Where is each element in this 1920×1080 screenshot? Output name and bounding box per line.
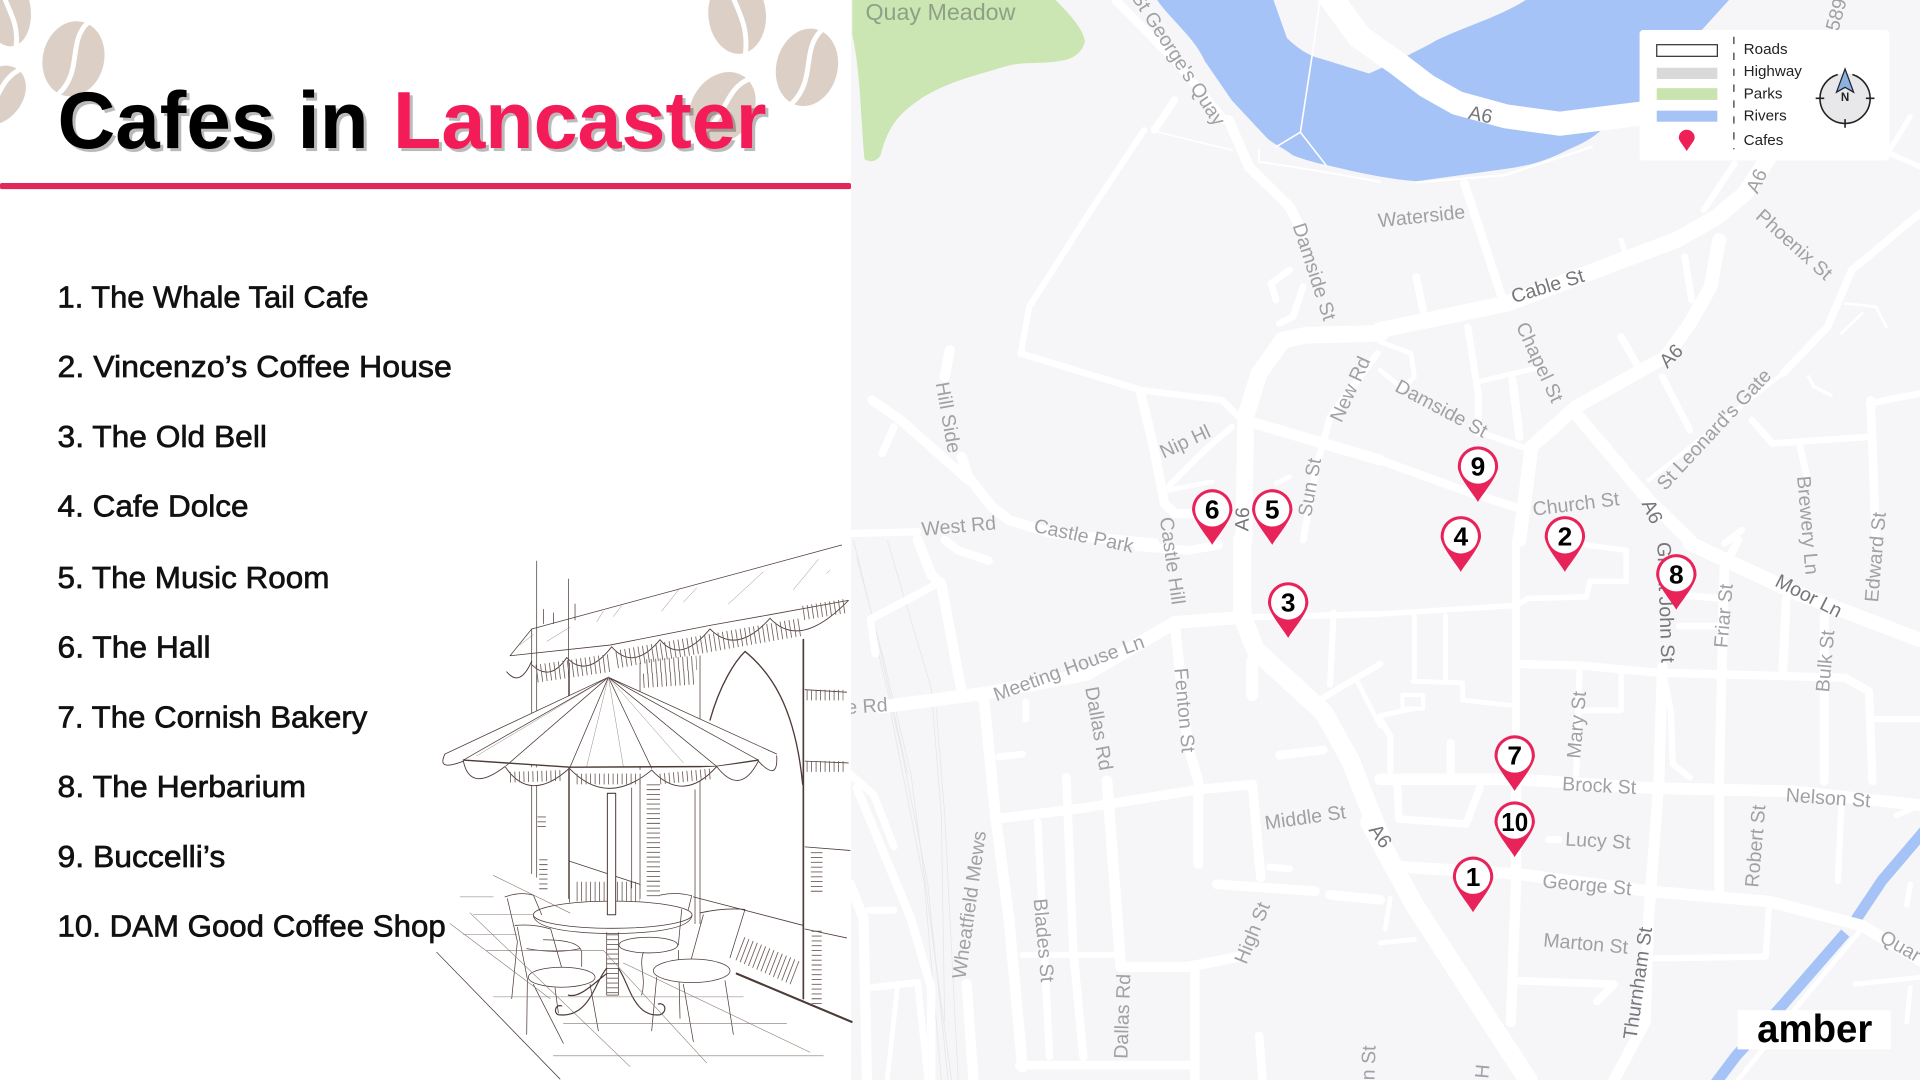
road labels: A6 [1364,820,1396,853]
road labels: Dallas Rd [1080,685,1117,772]
road labels: Mary St [1563,690,1591,759]
legend labels: Highway [1744,63,1802,80]
upper east roads [1327,0,1920,544]
cafe list items: 4. Cafe Dolce [58,490,249,524]
legend labels: Roads [1744,41,1788,58]
canal [1714,830,1920,1080]
cafe list items: 1. The Whale Tail Cafe [58,280,369,314]
illustration: table and pole [533,793,692,1015]
pin 1: 1 [1466,862,1480,892]
pin 6 [1192,489,1232,545]
road labels: Bulk St [1812,629,1839,693]
road labels: Quay Meadow [865,0,1016,25]
legend swatch: highway [1657,68,1717,79]
road labels: Brock St [1562,773,1637,799]
illustration: awning [507,545,848,678]
legend labels: Parks [1744,86,1783,103]
legend swatch: parks [1657,88,1717,100]
road labels: Thurnham St [1620,925,1657,1041]
road labels: Cable St [1509,265,1587,308]
cafe list items: 7. The Cornish Bakery [58,700,368,734]
compass: N [1841,91,1849,104]
road labels: e Rd [846,694,888,719]
road labels: A6 [1466,102,1495,128]
compass [1816,69,1874,128]
title [58,76,767,166]
legend [1640,30,1889,160]
cafe list items: 8. The Herbarium [58,770,306,804]
pin 8: 8 [1669,559,1684,589]
road labels: Fenton St [1169,667,1199,754]
road labels: High St [1230,899,1275,967]
road labels: Meeting House Ln [991,631,1147,706]
title divider [0,183,851,189]
legend icon: cafe pin [1679,130,1695,151]
road labels: Blades St [1029,898,1058,984]
road labels: A6 [1655,340,1688,373]
cafe list items: 9. Buccelli’s [58,840,225,874]
road labels: Castle Park [1032,515,1136,558]
legend labels: Cafes [1744,132,1784,149]
road labels: Castle Hill [1155,516,1189,606]
pin 7: 7 [1507,741,1522,771]
road network [850,0,1920,1080]
cafe list items: 5. The Music Room [58,561,329,595]
pin 9: 9 [1471,452,1485,482]
lower east roads [1370,540,1920,1080]
road labels: Edward St [1861,511,1891,603]
pin 9 [1458,446,1498,502]
road labels: Church St [1531,488,1621,521]
road labels: Robert St [1741,803,1771,888]
pin 2: 2 [1558,522,1572,552]
illustration: building [532,561,852,1022]
pin 4: 4 [1453,522,1468,552]
pin 3: 3 [1281,588,1295,618]
road labels: H [1471,1063,1494,1079]
panel: cafe list [0,0,852,1080]
road labels: A6 [1742,166,1772,197]
legend labels [1744,41,1802,149]
road labels: Chapel St [1511,319,1568,407]
road labels: Moor Ln [1772,570,1846,622]
illustration: chairs [505,893,745,1043]
road labels: George St [1542,870,1633,900]
pin 4 [1441,516,1481,572]
road labels: Sun St [1294,456,1326,518]
road labels: Hill Side [931,380,965,455]
road labels: Marton St [1542,929,1630,959]
park: Quay Meadow [852,0,1085,161]
road labels: A6 [1231,507,1254,532]
pin 1 [1453,857,1493,912]
road labels: Friar St [1710,582,1738,649]
pin 2 [1545,516,1585,572]
road labels: Dallas Rd [1110,974,1135,1059]
pin 10 [1494,801,1535,857]
lower west roads [850,540,1380,1080]
illustration: parasol [443,677,777,788]
road labels [846,0,1920,1080]
pin 3 [1268,582,1308,638]
pin 10: 10 [1501,807,1528,837]
road labels: St Leonard's Gate [1653,365,1776,495]
road labels: Phoenix St [1751,205,1837,285]
decoration: coffee beans [0,0,846,156]
road labels: Nip Hl [1156,421,1214,463]
map panel [846,0,1920,1080]
pin 5 [1252,489,1292,545]
illustration: floor lines [437,875,823,1079]
road labels: Great John St [1652,542,1678,664]
illustration: cafe terrace [437,545,852,1079]
legend labels: Rivers [1744,108,1787,125]
road labels: Brewery Ln [1792,475,1823,576]
river [1157,0,1729,181]
cafe list items: 10. DAM Good Coffee Shop [58,910,446,944]
road labels: West Rd [921,512,997,541]
title: Lancaster [393,76,767,166]
legend swatch: roads [1657,45,1717,56]
pin 8 [1656,554,1697,610]
cafe list items: 2. Vincenzo’s Coffee House [58,350,452,384]
railway lines [853,540,958,1080]
cafe list items: 3. The Old Bell [58,420,267,454]
upper west roads [850,100,1380,544]
pin 6: 6 [1205,495,1220,525]
road labels: Damside St [1391,376,1492,443]
legend swatch: rivers [1657,111,1717,122]
pin 5: 5 [1265,495,1280,525]
road labels: n St [1357,1045,1381,1080]
logo: amber: amber [1757,1008,1872,1051]
quay and river crossings [1116,0,1592,182]
road labels: New Rd [1326,353,1375,426]
cafe list items [58,280,452,944]
road labels: Nelson St [1785,784,1872,812]
title: Cafes in [58,76,369,166]
road labels: Damside St [1288,220,1340,324]
road labels: Middle St [1263,801,1348,835]
road labels: Lucy St [1565,829,1632,854]
road labels: A6 [1637,496,1667,527]
pin 7 [1494,735,1535,791]
road labels: Wheatfield Mews [949,829,991,980]
cafe list items: 6. The Hall [58,631,211,665]
road labels: Waterside [1377,201,1466,232]
